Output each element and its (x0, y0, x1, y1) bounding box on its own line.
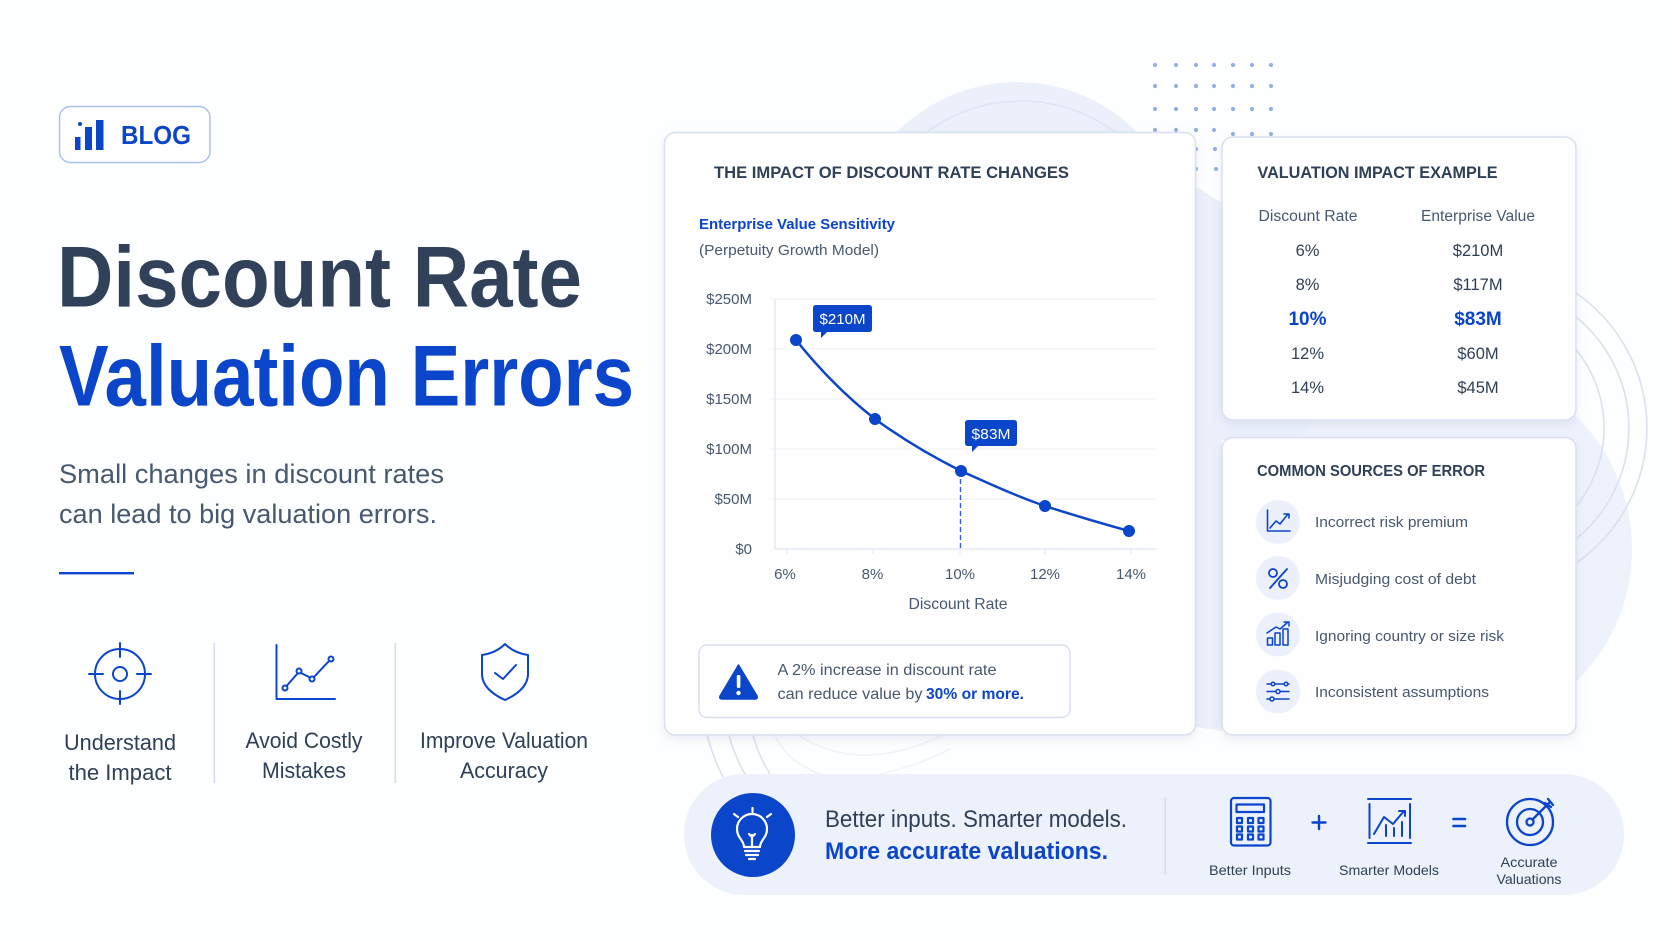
table rows: $117M (1453, 276, 1503, 294)
x axis labels: 10% (945, 566, 975, 583)
callout: $210M: $210M (820, 311, 866, 328)
y axis labels: $200M (706, 341, 752, 358)
panel: bottom summary banner (684, 774, 1624, 895)
icon captions: Smarter Models (1339, 862, 1439, 878)
feature label: Improve Valuation (420, 728, 588, 753)
alert text: A 2% increase in discount rate (778, 662, 997, 679)
icon captions: Valuations (1496, 871, 1562, 887)
y axis labels: $250M (706, 291, 752, 308)
icon captions (1209, 854, 1562, 887)
icon: model chart (1368, 799, 1411, 843)
plus sign (1312, 816, 1326, 829)
item: ignoring country or size risk: Ignoring country or size risk (1315, 628, 1505, 645)
item: misjudging cost of debt: Misjudging cost of debt (1315, 571, 1477, 588)
x axis labels: 8% (862, 566, 883, 583)
banner text: Better inputs. Smarter models. (825, 806, 1127, 833)
icon: trend chart (1268, 510, 1290, 531)
title: Discount Rate (57, 230, 582, 326)
table headers (1258, 208, 1535, 225)
alert text: 30% or more. (926, 686, 1024, 703)
feature: understand the impact (64, 643, 176, 785)
title (57, 230, 634, 424)
alert callout (699, 645, 1070, 718)
feature: avoid costly mistakes (246, 645, 362, 783)
item: misjudging cost of debt (1256, 556, 1477, 600)
y axis labels: $100M (706, 441, 752, 458)
icon: target with arrow (1507, 799, 1553, 845)
y axis labels: $150M (706, 391, 752, 408)
callout: $83M (965, 420, 1017, 452)
feature label: Accuracy (460, 758, 548, 783)
item: incorrect risk premium: Incorrect risk premium (1315, 514, 1468, 531)
item: inconsistent assumptions (1256, 670, 1489, 714)
icon: shield check (482, 644, 528, 700)
chart title: (Perpetuity Growth Model) (699, 242, 879, 259)
icon captions: Accurate (1500, 854, 1558, 870)
item: ignoring country or size risk (1256, 612, 1505, 656)
panel heading: THE IMPACT OF DISCOUNT RATE CHANGES (714, 163, 1069, 182)
table rows: 12% (1291, 345, 1324, 363)
feature label: the Impact (68, 760, 172, 785)
table rows: $60M (1457, 345, 1499, 363)
icon: bars with arrow (1267, 622, 1289, 645)
chart title (699, 216, 896, 259)
table rows: $45M (1457, 379, 1499, 397)
badge label: BLOG (121, 120, 191, 150)
feature label: Understand (64, 730, 176, 755)
icon: sliders (1267, 682, 1289, 701)
feature label (420, 728, 588, 783)
icon: calculator (1231, 798, 1270, 846)
panel heading: COMMON SOURCES OF ERROR (1257, 463, 1485, 480)
y axis labels: $0 (735, 541, 752, 558)
callout: $83M: $83M (972, 426, 1010, 443)
data points (790, 334, 1135, 537)
x axis labels: 14% (1116, 566, 1146, 583)
x axis labels (774, 566, 1146, 583)
item: incorrect risk premium (1256, 500, 1468, 544)
y axis labels (706, 291, 752, 558)
x axis title: Discount Rate (908, 596, 1008, 613)
table rows (1288, 242, 1503, 397)
feature label: Mistakes (262, 758, 346, 783)
panel: discount rate chart (664, 132, 1196, 735)
icon: warning triangle (720, 665, 757, 699)
table rows: 10% (1288, 309, 1327, 330)
equals sign (1454, 819, 1465, 826)
subtitle: can lead to big valuation errors. (59, 499, 437, 529)
callout: $210M (813, 305, 872, 338)
icon: bar chart (75, 120, 104, 150)
panel: common sources of error (1222, 438, 1576, 735)
table rows: $83M (1454, 309, 1502, 330)
line chart (706, 291, 1156, 613)
feature label: Avoid Costly (246, 728, 362, 753)
table headers: Discount Rate (1258, 208, 1358, 225)
icon: percent (1269, 569, 1287, 588)
feature label (246, 728, 362, 783)
subtitle (59, 459, 444, 529)
blog badge (60, 106, 210, 162)
table rows: $210M (1453, 242, 1503, 260)
feature: improve valuation accuracy (420, 644, 588, 783)
alert text (778, 662, 1024, 703)
x axis labels: 12% (1030, 566, 1060, 583)
table headers: Enterprise Value (1421, 208, 1535, 225)
icon captions: Better Inputs (1209, 862, 1291, 878)
accent rule (59, 572, 134, 574)
item: inconsistent assumptions: Inconsistent assumptions (1315, 684, 1489, 701)
icon: target (89, 643, 151, 704)
panel heading: VALUATION IMPACT EXAMPLE (1258, 164, 1498, 182)
table rows: 8% (1296, 276, 1320, 294)
alert text: can reduce value by (778, 686, 922, 703)
banner text: More accurate valuations. (825, 838, 1108, 865)
chart title: Enterprise Value Sensitivity (699, 216, 896, 233)
marker line at 10% (960, 471, 962, 549)
feature label (64, 730, 176, 785)
y axis labels: $50M (714, 491, 752, 508)
title: Valuation Errors (59, 328, 634, 424)
panel: valuation impact table (1222, 137, 1576, 420)
icon: line chart (276, 645, 335, 699)
icon: light bulb (711, 793, 795, 877)
subtitle: Small changes in discount rates (59, 459, 444, 489)
table rows: 6% (1296, 242, 1320, 260)
data curve (796, 340, 1129, 531)
banner text (825, 806, 1127, 865)
table rows: 14% (1291, 379, 1324, 397)
x axis labels: 6% (774, 566, 796, 583)
